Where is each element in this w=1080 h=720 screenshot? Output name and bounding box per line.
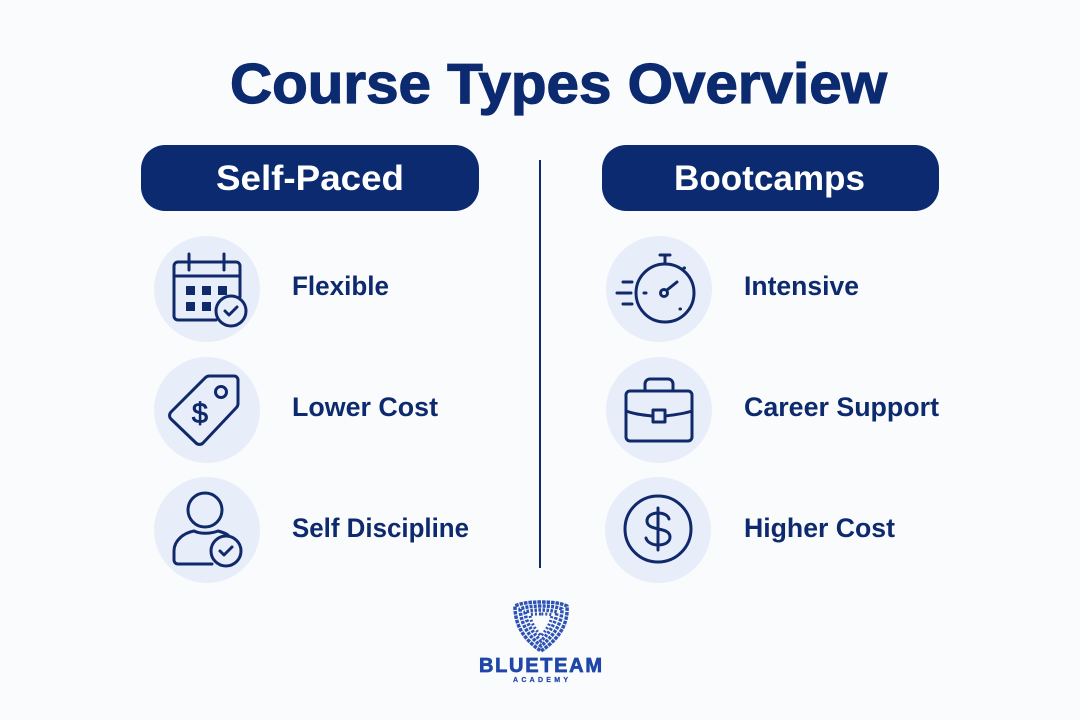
icon: shield mark: [515, 602, 567, 651]
item: Flexible: Flexible: [292, 271, 389, 301]
icon: person with check: [174, 493, 241, 566]
item: Higher Cost: [605, 477, 895, 583]
item: Self Discipline: Self Discipline: [292, 513, 469, 543]
icon: dollar coin: [625, 496, 691, 562]
item: Lower Cost: [154, 357, 438, 463]
icon: price tag with dollar: [170, 376, 238, 444]
title: Course Types Overview: [230, 52, 888, 116]
logo: Blueteam Academy: BLUETEAM: [479, 655, 602, 677]
column header: Bootcamps: [602, 145, 939, 211]
column header: Self-Paced: [141, 145, 479, 211]
vertical divider: [539, 160, 541, 568]
logo: Blueteam Academy: ACADEMY: [513, 677, 568, 684]
icon: price tag with dollar: $: [192, 398, 208, 430]
icon: calendar with check: [174, 254, 246, 326]
item: Career Support: Career Support: [744, 392, 939, 422]
column header: Bootcamps: Bootcamps: [674, 159, 865, 198]
column header: Self-Paced: Self-Paced: [216, 159, 404, 198]
item: Higher Cost: Higher Cost: [744, 513, 895, 543]
item: Intensive: Intensive: [744, 271, 859, 301]
logo: Blueteam Academy: [479, 602, 602, 684]
item: Self Discipline: [154, 477, 469, 583]
item: Career Support: [606, 357, 939, 463]
item: Flexible: [154, 236, 389, 342]
icon: stopwatch: [617, 255, 694, 322]
item: Intensive: [606, 236, 859, 342]
item: Lower Cost: Lower Cost: [292, 392, 438, 422]
icon: briefcase: [626, 379, 692, 441]
